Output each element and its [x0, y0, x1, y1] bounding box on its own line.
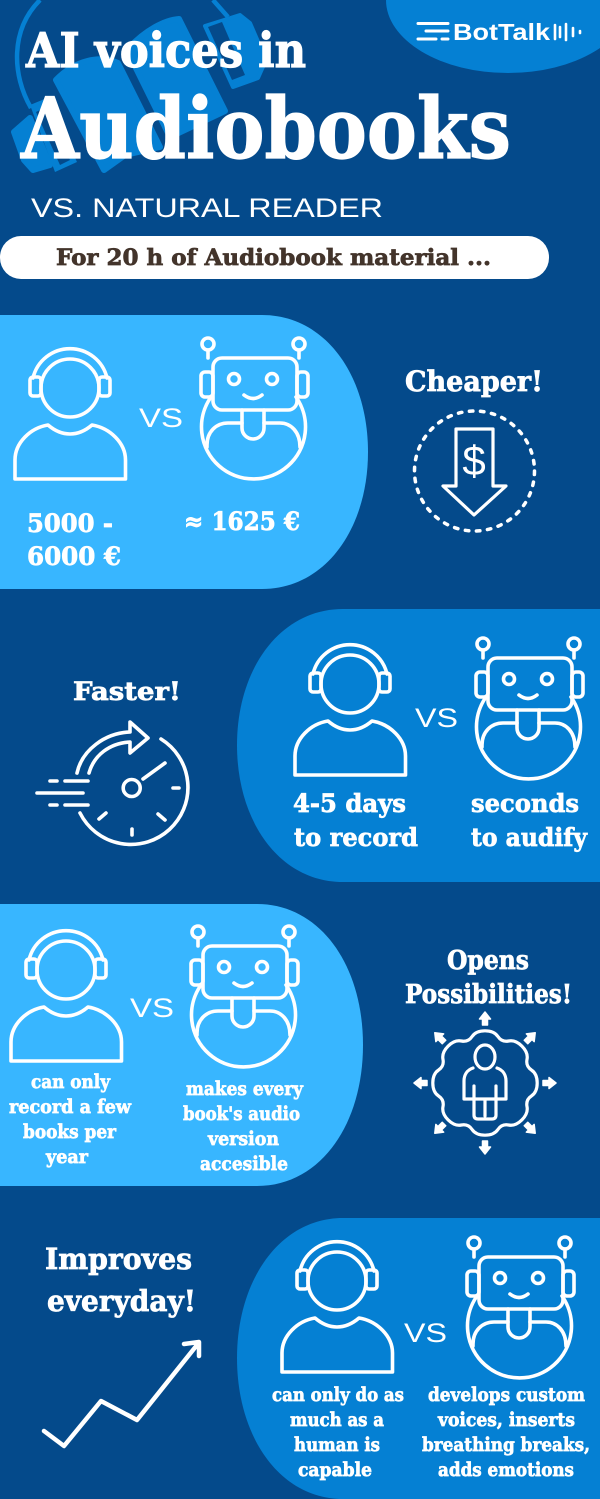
- icon: price down arrow: [414, 411, 534, 531]
- AI reach: [183, 1078, 304, 1175]
- vs label: VS: [139, 403, 183, 433]
- logo: BotTalk: [386, 0, 600, 73]
- human capability: much as a: [290, 1409, 384, 1431]
- human reach: books per: [23, 1121, 117, 1143]
- AI reach: makes every: [186, 1078, 304, 1100]
- AI capability: [422, 1384, 590, 1481]
- icon: price down arrow: $: [462, 437, 486, 484]
- vs label: VS: [415, 703, 458, 733]
- AI time: to audify: [471, 823, 588, 852]
- heading: opens possibilities: [405, 946, 572, 1010]
- human reach: record a few: [9, 1096, 132, 1118]
- AI time: seconds: [471, 789, 579, 818]
- heading: improves everyday: [45, 1242, 196, 1318]
- icon: human narrator: [282, 1242, 392, 1372]
- human capability: human is: [294, 1434, 380, 1456]
- icon: human narrator: [295, 645, 406, 775]
- icon: robot: [191, 926, 298, 1067]
- AI time: [471, 789, 588, 852]
- human capability: capable: [298, 1459, 372, 1481]
- vs label: VS: [130, 993, 174, 1023]
- panel: capability comparison: [237, 1218, 600, 1499]
- icon: human narrator: [11, 931, 122, 1061]
- human time: 4-5 days: [293, 789, 406, 818]
- banner: for 20 h of audiobook material: [0, 236, 549, 279]
- icon: robot: [201, 338, 308, 479]
- logo: BotTalk: BotTalk: [453, 19, 550, 45]
- banner: for 20 h of audiobook material: For 20 h of Audiobook material ...: [56, 245, 491, 271]
- AI reach: version: [207, 1128, 279, 1150]
- vs label: VS: [404, 1318, 447, 1348]
- icon: human narrator: [15, 349, 126, 479]
- human reach: [9, 1071, 132, 1168]
- AI reach: book's audio: [183, 1103, 300, 1125]
- icon: rising trend arrow: [44, 1342, 199, 1446]
- icon: stopwatch with speed lines: [37, 722, 188, 844]
- human cost: 5000 -: [27, 509, 113, 538]
- human time: [293, 789, 418, 852]
- panel: cost comparison: [0, 315, 368, 589]
- AI capability: voices, inserts: [437, 1409, 575, 1431]
- panel: reach comparison: [0, 904, 363, 1186]
- AI capability: develops custom: [428, 1384, 585, 1406]
- AI capability: adds emotions: [438, 1459, 574, 1481]
- human capability: [272, 1384, 404, 1481]
- title: [20, 23, 511, 178]
- AI reach: accesible: [200, 1153, 288, 1175]
- heading: cheaper: Cheaper!: [405, 365, 543, 398]
- human reach: year: [45, 1146, 89, 1168]
- header illustration: headphones and book: [14, 0, 266, 172]
- heading: opens possibilities: Possibilities!: [405, 980, 572, 1010]
- subtitle: VS. NATURAL READER: [31, 193, 383, 223]
- heading: opens possibilities: Opens: [447, 946, 529, 976]
- heading: faster: Faster!: [73, 677, 181, 706]
- human cost: 6000 €: [27, 542, 121, 571]
- title: Audiobooks: [20, 79, 511, 178]
- icon: robot: [476, 638, 583, 779]
- panel: speed comparison: [237, 609, 600, 882]
- icon: robot: [467, 1237, 574, 1378]
- human cost: [27, 509, 121, 571]
- human time: to record: [294, 823, 418, 852]
- heading: improves everyday: Improves: [45, 1242, 192, 1276]
- AI cost: ≈ 1625 €: [184, 507, 300, 536]
- human capability: can only do as: [272, 1384, 404, 1406]
- heading: improves everyday: everyday!: [47, 1284, 196, 1318]
- human reach: can only: [31, 1071, 111, 1093]
- title: AI voices in: [25, 23, 306, 79]
- icon: person in gear with arrows: [385, 983, 585, 1183]
